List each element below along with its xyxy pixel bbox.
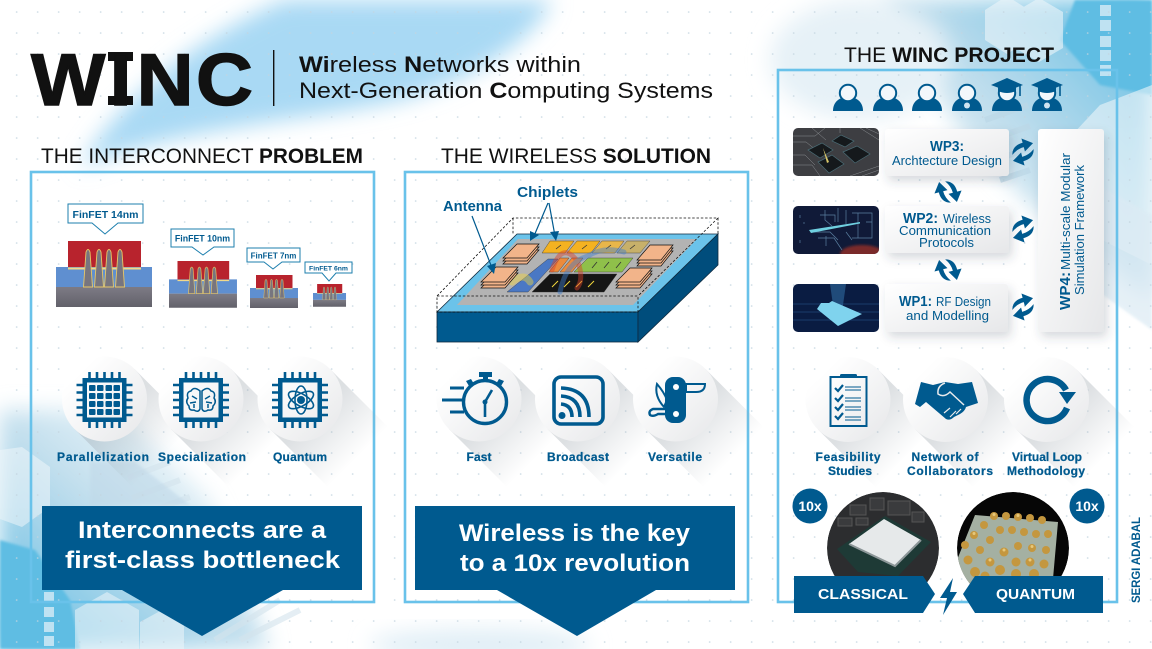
icon: feasibility studies — [806, 357, 938, 490]
WP4 box: Simulation Framework — [1073, 164, 1087, 295]
banner: classical — [794, 576, 935, 613]
icon: lightning bolt — [940, 578, 957, 615]
WP1 box: and Modelling — [906, 309, 989, 323]
icon: broadcast: Broadcast — [547, 450, 609, 464]
icon: quantum: Quantum — [273, 450, 327, 464]
credit: SERGI ADABAL — [1131, 517, 1143, 603]
panel: WINC project — [778, 70, 1117, 602]
WP2 box: Communication — [899, 224, 991, 238]
icon: network of collaborators — [903, 357, 1036, 490]
callout: wireless key — [415, 506, 735, 636]
banner: quantum: QUANTUM — [996, 587, 1075, 603]
FinFET 10nm: FinFET 10nm — [175, 234, 230, 244]
callout: bottleneck — [42, 506, 362, 636]
banner: quantum — [963, 576, 1103, 613]
subtitle — [299, 52, 713, 103]
panel: wireless solution — [405, 172, 748, 602]
WP3 box — [885, 129, 1009, 176]
icon: specialization — [158, 356, 291, 489]
badge: 10x quantum — [1070, 488, 1104, 524]
subtitle: Next-Generation Computing Systems — [299, 78, 713, 103]
banner: classical: CLASSICAL — [818, 587, 908, 603]
FinFET 7nm — [247, 248, 300, 308]
label: Antenna — [443, 199, 503, 274]
wireless swirl — [512, 250, 624, 292]
chart: FinFET scaling — [56, 204, 352, 308]
photo: quantum chip — [957, 492, 1069, 584]
WP1 box — [885, 284, 1008, 332]
title: W — [31, 40, 106, 121]
icon: network of collaborators: Collaborators — [907, 464, 993, 478]
WP1 box: WP1: — [899, 293, 932, 310]
icon: fast — [436, 356, 569, 489]
chiplets — [507, 241, 650, 292]
panel: interconnect problem — [31, 172, 374, 602]
WP2 box: Wireless — [943, 212, 991, 226]
icon: feasibility studies: Studies — [828, 464, 872, 478]
icon: virtual loop — [1004, 357, 1136, 490]
callout: bottleneck: Interconnects are a — [78, 517, 327, 544]
icon: versatile — [633, 356, 766, 489]
photo: classical processor — [827, 492, 939, 582]
bottom left art — [0, 410, 270, 649]
FinFET 10nm — [169, 229, 237, 308]
WP2 box — [885, 206, 1009, 253]
WP3 box: WP3: — [930, 138, 964, 155]
icon: virtual loop: Virtual Loop — [1012, 450, 1082, 464]
heading: wireless solution: THE WIRELESS SOLUTION — [441, 145, 711, 168]
FinFET 14nm: FinFET 14nm — [73, 209, 138, 221]
exchange arrows — [932, 136, 1038, 323]
WP4 box: Multi-scale Modular — [1059, 153, 1073, 270]
icon: specialization: Specialization — [158, 450, 246, 464]
icon: quantum — [258, 356, 390, 489]
icon: fast: Fast — [466, 450, 492, 464]
WP4 box — [1038, 129, 1104, 332]
package block — [437, 234, 718, 342]
FinFET 14nm — [56, 204, 152, 307]
dashed volume — [437, 218, 718, 312]
heading: interconnect problem: THE INTERCONNECT PROBLEM — [41, 145, 363, 168]
top swath — [80, 0, 552, 168]
title: I — [110, 40, 132, 121]
FinFET 7nm: FinFET 7nm — [251, 252, 296, 260]
icon: broadcast — [535, 356, 668, 489]
WP3 box: Archtecture Design — [892, 154, 1002, 168]
image: architecture chips — [793, 128, 879, 176]
icon: parallelization: Parallelization — [57, 450, 149, 464]
team icons — [833, 78, 1063, 111]
WP2 box: Protocols — [919, 236, 974, 250]
callout: bottleneck: first-class bottleneck — [65, 547, 341, 574]
FinFET 6nm: FinFET 6nm — [309, 266, 348, 272]
icon: network of collaborators: Network of — [912, 450, 980, 464]
badge: 10x classical: 10x — [798, 498, 822, 514]
badge: 10x classical — [792, 488, 828, 524]
title: N — [137, 40, 194, 121]
title — [31, 40, 713, 121]
WP1 box: RF Design — [936, 295, 991, 309]
top right art — [880, 0, 1152, 300]
icon: virtual loop: Methodology — [1007, 464, 1085, 478]
callout: wireless key: Wireless is the key — [459, 520, 691, 547]
label: Chiplets: Chiplets — [517, 185, 578, 201]
label: Antenna: Antenna — [443, 199, 503, 215]
WP4 box: WP4: — [1057, 272, 1074, 310]
chart: wireless chip package — [437, 185, 718, 342]
icon: parallelization — [57, 356, 194, 489]
subtitle: Wireless Networks within — [299, 52, 581, 77]
badge: 10x quantum: 10x — [1075, 498, 1099, 514]
image: protocols circuit — [793, 206, 879, 254]
title: C — [196, 40, 253, 121]
callout: wireless key: to a 10x revolution — [460, 550, 690, 577]
icon: versatile: Versatile — [648, 450, 702, 464]
antenna stacks — [481, 244, 673, 288]
image: RF design — [793, 284, 879, 332]
WP2 box: WP2: — [903, 210, 938, 227]
FinFET 6nm — [305, 262, 352, 307]
heading: WINC project: THE WINC PROJECT — [844, 44, 1054, 67]
icon: feasibility studies: Feasibility — [816, 450, 881, 464]
label: Chiplets — [517, 185, 578, 241]
